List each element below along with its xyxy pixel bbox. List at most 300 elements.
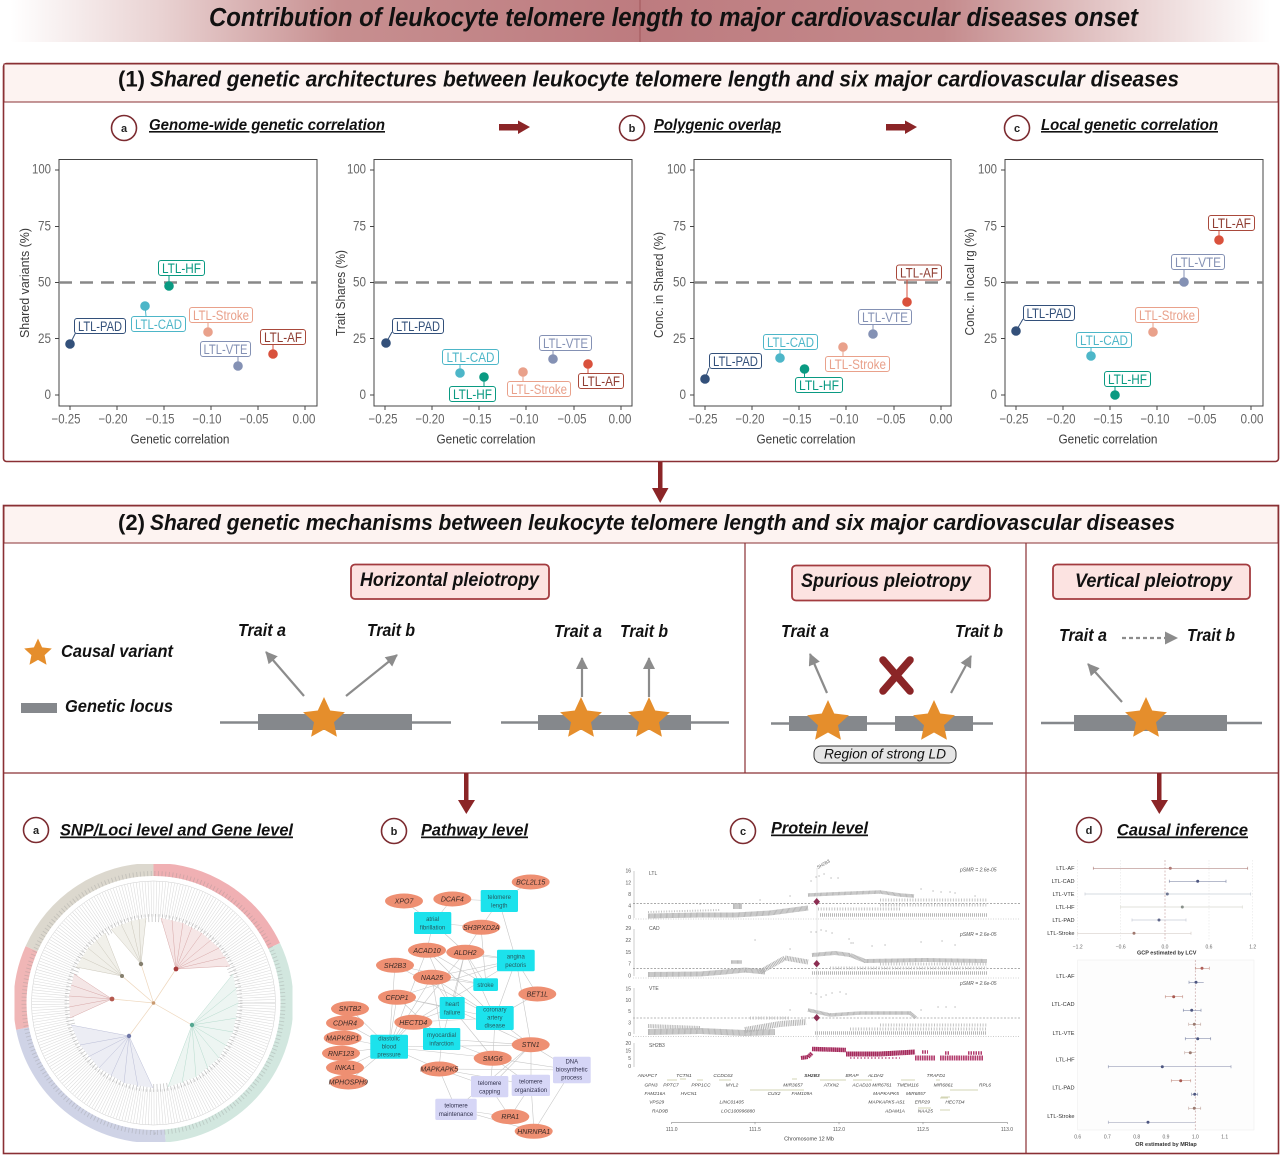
- legend: causal variant and genetic locus: [21, 638, 174, 716]
- legend: causal variant and genetic locus: Causal variant: [61, 641, 174, 661]
- track: SH2B3 eQTL: 15: [625, 1048, 631, 1054]
- scatter plot: trait shares: −0.20: [416, 412, 444, 426]
- scatter plot: shared variants: −0.20: [98, 412, 128, 426]
- point: LTL-HF: LTL-HF: [162, 261, 201, 276]
- telomere process nodes: process: [561, 1076, 582, 1082]
- scatter plot: shared variants: Genetic correlation: [130, 432, 230, 446]
- gene track: ADAM1A: [884, 1109, 905, 1115]
- point: LTL-Stroke: LTL-Stroke: [511, 382, 567, 397]
- diagram: two variants two traits: Trait a: [554, 621, 602, 641]
- point: LTL-CAD: [764, 334, 818, 362]
- gene track: MYL2: [726, 1082, 739, 1088]
- track: CAD: 0: [628, 974, 631, 980]
- heading c: protein level: c: [740, 826, 746, 838]
- point: LTL-HF: [796, 365, 842, 393]
- track: VTE: [625, 981, 997, 1038]
- scatter plot: trait shares: 25: [353, 331, 366, 346]
- track: CAD: CAD: [649, 926, 660, 932]
- legend: causal variant and genetic locus: Genetic locus: [65, 696, 173, 716]
- point: LTL-CAD: [132, 302, 186, 332]
- forest plot: GCP estimated by LCV: LTL-PAD: [1052, 918, 1074, 924]
- point: LTL-VTE: [1172, 254, 1224, 286]
- gene labels: INKA1: [335, 1065, 355, 1072]
- point: LTL-PAD: [701, 354, 762, 383]
- scatter plot: concentration in local rg: −0.20: [1046, 412, 1076, 426]
- disease nodes: myocardial: [427, 1033, 456, 1039]
- heading b: pathway level: b: [391, 826, 398, 838]
- track: LTL: 0: [628, 915, 631, 921]
- gene labels: RNF123: [328, 1051, 354, 1058]
- heading d: causal inference: [1076, 818, 1248, 842]
- diagram: one variant two traits: [220, 620, 451, 737]
- point: LTL-VTE: [540, 336, 592, 363]
- disease nodes: failure: [444, 1010, 461, 1016]
- forest plot: GCP estimated by LCV: 1.2: [1249, 944, 1256, 950]
- track: CAD: 15: [625, 950, 631, 956]
- scatter plot: trait shares: Genetic correlation: [436, 432, 536, 446]
- point: LTL-AF: [260, 330, 306, 358]
- track: SH2B3 eQTL: 20: [625, 1041, 631, 1047]
- point: LTL-VTE: [858, 310, 912, 338]
- fan: grey cluster one: [76, 933, 122, 976]
- point: LTL-CAD: LTL-CAD: [767, 335, 814, 350]
- gene labels: NAA25: [421, 975, 443, 982]
- gene track: RPL6: [979, 1082, 991, 1088]
- point: LTL-HF: [158, 260, 204, 290]
- icon: red cross: [883, 660, 910, 691]
- disease nodes: artery: [487, 1016, 502, 1022]
- gene track: HVCN1: [681, 1091, 697, 1097]
- label: horizontal pleiotropy: Horizontal pleiotropy: [360, 569, 540, 591]
- scatter plot: concentration in local rg: 75: [984, 218, 997, 234]
- scatter plot: trait shares: −0.15: [462, 412, 492, 426]
- heading b: pathway level: [382, 818, 529, 844]
- scatter plot: concentration in shared: −0.10: [830, 412, 858, 426]
- gene track: MIR6857: [906, 1091, 926, 1097]
- scatter plot: trait shares: Trait Shares (%): [333, 250, 348, 336]
- scatter plot: concentration in shared: [651, 160, 952, 446]
- track: VTE: 3: [628, 1020, 631, 1026]
- point: LTL-VTE: [200, 342, 250, 370]
- telomere process nodes: [435, 1057, 591, 1120]
- scatter plot: concentration in local rg: 100: [978, 162, 997, 176]
- gene labels: XPO7: [394, 898, 414, 906]
- forest plot: GCP estimated by LCV: −1.2: [1073, 944, 1083, 950]
- chromosome axis: Chromosome 12 Mb: [784, 1136, 834, 1142]
- disease nodes: infarction: [429, 1042, 454, 1048]
- track: LTL: 12: [625, 880, 631, 886]
- heading b: pathway level: Pathway level: [421, 820, 529, 840]
- scatter plot: concentration in local rg: −0.10: [1140, 412, 1170, 426]
- point: LTL-AF: LTL-AF: [900, 266, 938, 280]
- title bar: Contribution of leukocyte telomere length to major cardiovascular diseases onset: [209, 4, 1139, 32]
- tree trunk branches: [112, 964, 192, 1036]
- track: VTE: 15: [625, 986, 631, 992]
- disease nodes: length: [491, 904, 507, 910]
- point: LTL-VTE: LTL-VTE: [543, 336, 588, 351]
- point: LTL-CAD: [1076, 332, 1132, 360]
- forest plot: GCP estimated by LCV: 0.0: [1162, 944, 1169, 950]
- scatter plot: shared variants: Shared variants (%): [17, 228, 32, 338]
- gene labels: CDHR4: [333, 1020, 357, 1028]
- gene track: GPN3: [644, 1082, 658, 1088]
- gene track: ALDH2: [867, 1073, 884, 1079]
- gene labels: STN1: [522, 1042, 540, 1049]
- scatter plot: concentration in local rg: [962, 160, 1264, 446]
- gene track: RAD9B: [652, 1109, 669, 1115]
- forest plot: OR estimated by MRlap: LTL-HF: [1056, 1058, 1075, 1064]
- heading a: SNP/Loci level and Gene level: [24, 818, 294, 842]
- scatter plot: trait shares: 75: [353, 218, 366, 234]
- panel 2 heading: (2): [118, 510, 145, 535]
- scatter plot: shared variants: −0.05: [240, 412, 268, 426]
- diagram: one variant two traits: Trait a: [238, 620, 286, 640]
- scatter plot: trait shares: 0: [360, 387, 366, 402]
- gene track: PPTC7: [663, 1082, 679, 1088]
- gene track: NAA25: [918, 1109, 933, 1115]
- gene track: BRAP: [845, 1073, 859, 1079]
- scatter plot: shared variants: [17, 160, 317, 446]
- forest plot: GCP estimated by LCV: LTL-Stroke: [1047, 931, 1074, 937]
- forest plot: OR estimated by MRlap: LTL-Stroke: [1047, 1114, 1074, 1120]
- telomere process nodes: organization: [514, 1088, 547, 1094]
- step a heading: Genome-wide genetic correlation: [149, 117, 385, 134]
- gene labels: ACAD10: [412, 948, 441, 955]
- gene labels: CFDP1: [386, 995, 409, 1002]
- gene labels: BET1L: [527, 992, 548, 998]
- point: LTL-CAD: LTL-CAD: [446, 350, 495, 365]
- forest plot: OR estimated by MRlap: 0.9: [1163, 1134, 1170, 1140]
- title bar: [10, 0, 1270, 42]
- scatter plot: concentration in shared: −0.15: [782, 412, 812, 426]
- scatter plot: concentration in shared: −0.25: [688, 412, 718, 426]
- forest plot: OR estimated by MRlap: 1.0: [1192, 1134, 1199, 1140]
- point: LTL-VTE: LTL-VTE: [1175, 255, 1221, 270]
- panel 2 heading: Shared genetic mechanisms between leukocyte telomere length and six major cardiovascular diseases: [150, 510, 1175, 535]
- track: SH2B3 eQTL: SH2B3: [649, 1043, 665, 1049]
- point: LTL-PAD: [382, 318, 444, 347]
- scatter plot: concentration in shared: Genetic correlation: [756, 432, 856, 446]
- disease nodes: pressure: [377, 1052, 401, 1058]
- scatter plot: concentration in shared: Conc. in Shared (%): [651, 232, 666, 338]
- telomere process nodes: capping: [479, 1090, 500, 1096]
- gene track: TMEM116: [897, 1082, 919, 1088]
- track: VTE: 5: [628, 1009, 631, 1015]
- scatter plot: concentration in shared: 50: [673, 274, 686, 290]
- gene labels: HNRNPA1: [517, 1129, 550, 1136]
- diagram: two variants two traits: [501, 621, 729, 737]
- panel 1: shared genetic architectures: [4, 64, 1278, 462]
- point: LTL-Stroke: [190, 308, 252, 336]
- circular gene tree: [20, 870, 287, 1136]
- scatter plot: concentration in local rg: Conc. in local rg (%): [962, 228, 977, 336]
- forest plot: OR estimated by MRlap: LTL-CAD: [1052, 1002, 1074, 1008]
- diagram: vertical pleiotropy: [1041, 625, 1262, 737]
- gene track: [637, 1073, 991, 1115]
- icon: causal variant star: [24, 638, 52, 665]
- point: LTL-PAD: LTL-PAD: [713, 354, 758, 369]
- scatter plot: shared variants: 0: [44, 387, 51, 402]
- gene labels: HECTD4: [399, 1020, 427, 1027]
- disease nodes: disease: [484, 1024, 506, 1030]
- track: LTL: 16: [625, 868, 631, 874]
- gene labels: SMG6: [483, 1056, 503, 1063]
- forest plot: GCP estimated by LCV: GCP estimated by LCV: [1137, 950, 1197, 956]
- forest plot: GCP estimated by LCV: LTL-VTE: [1053, 892, 1075, 898]
- forest plot: GCP estimated by LCV: LTL-HF: [1056, 905, 1075, 911]
- panel 2 heading: [4, 506, 1278, 543]
- disease nodes: stroke: [477, 983, 494, 989]
- disease nodes: angina: [507, 954, 525, 960]
- point: LTL-AF: [896, 265, 942, 306]
- track: CAD: 29: [625, 926, 631, 932]
- track: CAD: 7: [628, 962, 631, 968]
- disease nodes: blood: [382, 1044, 396, 1050]
- panel 1 heading: Shared genetic architectures between leukocyte telomere length and six major cardiovascular diseases: [150, 66, 1179, 92]
- gene track: MAPKAPK5-AS1: [868, 1100, 905, 1106]
- gene labels: RPA1: [501, 1114, 519, 1121]
- point: LTL-AF: [1208, 216, 1254, 244]
- track: CAD: [625, 926, 997, 980]
- track: CAD: pSMR = 2.6e-05: [959, 932, 997, 938]
- diagram: spurious pleiotropy with LD region: Trait b: [955, 621, 1003, 641]
- scatter plot: trait shares: −0.25: [368, 412, 398, 426]
- scatter plot: concentration in shared: 100: [667, 162, 686, 176]
- scatter plot: concentration in local rg: −0.05: [1188, 412, 1216, 426]
- forest plot: OR estimated by MRlap: LTL-AF: [1056, 974, 1075, 980]
- label: region of strong LD: Region of strong LD: [824, 746, 946, 762]
- gene track: FAM109A: [792, 1091, 812, 1097]
- scatter plot: shared variants: 0.00: [292, 412, 316, 426]
- forest plot: OR estimated by MRlap: [1047, 960, 1254, 1148]
- telomere process nodes: telomere: [478, 1081, 502, 1087]
- gene track: ERP29: [915, 1100, 930, 1106]
- gene track: MIR6761: [872, 1082, 892, 1088]
- diagram: one variant two traits: Trait b: [367, 620, 415, 640]
- forest plot: OR estimated by MRlap: 0.6: [1074, 1134, 1081, 1140]
- gene track: ATXN2: [823, 1082, 839, 1088]
- heading d: causal inference: d: [1086, 825, 1092, 837]
- telomere process nodes: telomere: [444, 1104, 468, 1110]
- track: SH2B3 eQTL: [625, 1041, 983, 1070]
- chromosome axis: [666, 1122, 1013, 1142]
- point: LTL-HF: LTL-HF: [453, 387, 492, 402]
- arrow: vertical pleiotropy down to causal inference: [1151, 773, 1168, 814]
- forest plot: OR estimated by MRlap: 0.7: [1104, 1134, 1111, 1140]
- scatter plot: concentration in local rg: 25: [984, 331, 997, 346]
- heading c: protein level: [730, 818, 869, 844]
- track: CAD: 22: [625, 938, 631, 944]
- chromosome axis: 111.5: [749, 1127, 761, 1133]
- scatter plot: shared variants: 50: [38, 274, 51, 290]
- track: LTL: SH2B3: [816, 858, 831, 870]
- step a heading: a: [121, 123, 128, 135]
- track: VTE: 10: [625, 998, 631, 1004]
- point: LTL-Stroke: LTL-Stroke: [1139, 308, 1195, 323]
- gene labels: SH2B3: [384, 963, 406, 970]
- track: LTL: 4: [628, 904, 631, 910]
- label: vertical pleiotropy: Vertical pleiotropy: [1075, 570, 1233, 592]
- disease nodes: [370, 890, 535, 1059]
- disease nodes: diastolic: [378, 1036, 400, 1042]
- disease nodes: atrial: [426, 917, 439, 923]
- scatter plot: concentration in shared: −0.05: [876, 412, 906, 426]
- step b heading: b: [629, 123, 636, 135]
- scatter plot: trait shares: −0.10: [510, 412, 538, 426]
- forest plot: OR estimated by MRlap: OR estimated by MRlap: [1135, 1142, 1197, 1148]
- panel 1 heading: (1): [118, 66, 145, 92]
- gene track: ANAPC7: [637, 1073, 657, 1079]
- point: LTL-AF: LTL-AF: [582, 374, 620, 389]
- label: spurious pleiotropy: [792, 566, 990, 600]
- forest plot: GCP estimated by LCV: 0.6: [1206, 944, 1213, 950]
- scatter plot: trait shares: 0.00: [608, 412, 632, 426]
- diagram: two variants two traits: Trait b: [620, 621, 668, 641]
- gene labels: [326, 880, 550, 1136]
- diagram: vertical pleiotropy: Trait b: [1187, 625, 1235, 645]
- point: LTL-Stroke: [1136, 308, 1198, 336]
- scatter plot: concentration in local rg: 50: [984, 274, 997, 290]
- diagram: vertical pleiotropy: Trait a: [1059, 625, 1107, 645]
- scatter plot: concentration in local rg: 0.00: [1240, 412, 1264, 426]
- scatter plot: shared variants: 100: [32, 162, 51, 176]
- point: LTL-VTE: LTL-VTE: [204, 342, 248, 357]
- gene track: SH2B3: [804, 1073, 820, 1079]
- scatter plot: trait shares: [333, 160, 632, 446]
- locus zoom plot: [625, 858, 1020, 1142]
- gene track: MIR3657: [783, 1082, 803, 1088]
- chromosome axis: 112.0: [833, 1127, 845, 1133]
- step c heading: Local genetic correlation: [1041, 117, 1218, 134]
- point: LTL-Stroke: [508, 368, 570, 397]
- gene labels: MPHOSPH9: [329, 1080, 368, 1086]
- fan: green cluster: [168, 974, 238, 1087]
- gene track: LINC01405: [720, 1100, 744, 1106]
- gene track: MIR6861: [934, 1082, 953, 1088]
- forest plot: OR estimated by MRlap: 0.8: [1133, 1134, 1140, 1140]
- gene track: LOC100996880: [721, 1109, 755, 1115]
- scatter plot: trait shares: 50: [353, 274, 366, 290]
- heading d: causal inference: Causal inference: [1117, 820, 1248, 840]
- point: LTL-Stroke: [826, 343, 890, 372]
- label: vertical pleiotropy: [1053, 564, 1250, 599]
- track: SH2B3 eQTL: 0: [628, 1064, 631, 1070]
- scatter plot: trait shares: −0.05: [558, 412, 586, 426]
- step c heading: [1004, 116, 1218, 140]
- point: LTL-PAD: [1012, 306, 1074, 335]
- scatter plot: concentration in shared: 75: [673, 218, 686, 234]
- point: LTL-HF: [450, 373, 496, 402]
- chromosome axis: 111.0: [666, 1127, 678, 1133]
- track: LTL: LTL: [649, 871, 657, 877]
- disease nodes: heart: [445, 1002, 459, 1008]
- gene track: PPP1CC: [691, 1082, 711, 1088]
- fan: red cluster: [161, 918, 230, 969]
- scatter plot: concentration in local rg: −0.25: [1000, 412, 1028, 426]
- telomere process nodes: DNA: [565, 1060, 578, 1066]
- disease nodes: coronary: [483, 1008, 506, 1014]
- track: SH2B3 eQTL: 5: [628, 1056, 631, 1062]
- point: LTL-PAD: LTL-PAD: [78, 319, 122, 334]
- gene track: TRAFD1: [927, 1073, 946, 1079]
- track: VTE: VTE: [649, 986, 659, 992]
- step b heading: Polygenic overlap: [654, 117, 781, 134]
- gene labels: ALDH2: [453, 950, 477, 957]
- scatter plot: concentration in shared: 0.00: [930, 412, 952, 426]
- telomere process nodes: maintenance: [439, 1112, 474, 1118]
- gene labels: SH3PXD2A: [463, 925, 500, 932]
- scatter plot: shared variants: 25: [38, 331, 51, 346]
- fan: grey cluster two: [111, 918, 146, 964]
- scatter plot: trait shares: 100: [347, 162, 366, 176]
- scatter plot: concentration in shared: 0: [680, 387, 686, 402]
- diagram: spurious pleiotropy with LD region: Trait a: [781, 621, 829, 641]
- diagram: spurious pleiotropy with LD region: [771, 621, 1003, 763]
- point: LTL-Stroke: LTL-Stroke: [193, 308, 249, 323]
- gene labels: BCL2L15: [516, 880, 545, 886]
- scatter plot: shared variants: −0.10: [192, 412, 222, 426]
- point: LTL-PAD: [66, 318, 126, 348]
- point: LTL-PAD: LTL-PAD: [396, 319, 440, 334]
- telomere process nodes: telomere: [519, 1080, 543, 1086]
- point: LTL-AF: LTL-AF: [1212, 216, 1251, 231]
- forest plot: GCP estimated by LCV: −0.6: [1116, 944, 1126, 950]
- label: spurious pleiotropy: Spurious pleiotropy: [801, 570, 972, 592]
- chromosome axis: 112.5: [917, 1127, 929, 1133]
- forest plot: OR estimated by MRlap: LTL-VTE: [1053, 1031, 1075, 1037]
- network edges: [341, 882, 572, 1131]
- point: LTL-HF: LTL-HF: [1108, 372, 1147, 387]
- forest plot: GCP estimated by LCV: LTL-AF: [1056, 866, 1075, 872]
- disease nodes: telomere: [488, 895, 512, 901]
- step c heading: c: [1014, 123, 1020, 135]
- point: LTL-AF: [578, 360, 624, 389]
- scatter plot: concentration in local rg: 0: [990, 387, 997, 402]
- step a heading: [112, 116, 385, 140]
- heading a: SNP/Loci level and Gene level: SNP/Loci level and Gene level: [60, 820, 294, 840]
- forest plot: OR estimated by MRlap: 1.1: [1221, 1134, 1228, 1140]
- fan: blue cluster: [71, 1025, 153, 1088]
- gene labels: DCAF4: [441, 896, 464, 904]
- point: LTL-AF: LTL-AF: [264, 330, 302, 345]
- gene labels: MAPKBP1: [326, 1036, 359, 1042]
- pathway network: [322, 874, 591, 1139]
- gene track: VPS29: [649, 1100, 664, 1106]
- fan: second red cluster: [69, 974, 112, 1018]
- forest plot: GCP estimated by LCV: [1047, 860, 1256, 956]
- point: LTL-Stroke: LTL-Stroke: [829, 357, 886, 372]
- track: LTL: 8: [628, 892, 631, 898]
- scatter plot: shared variants: 75: [38, 218, 51, 234]
- heading c: protein level: Protein level: [771, 818, 869, 838]
- chromosome axis: 113.0: [1001, 1127, 1013, 1133]
- point: LTL-VTE: LTL-VTE: [862, 310, 908, 325]
- scatter plot: concentration in local rg: −0.15: [1094, 412, 1122, 426]
- gene track: TCTN1: [676, 1073, 692, 1079]
- track: VTE: 0: [628, 1032, 631, 1038]
- gene track: ACAD10: [851, 1082, 871, 1088]
- forest plot: OR estimated by MRlap: LTL-PAD: [1052, 1086, 1074, 1092]
- panel 2: shared genetic mechanisms: [4, 506, 1278, 1154]
- label: horizontal pleiotropy: [351, 564, 549, 599]
- heading a: SNP/Loci level and Gene level: a: [33, 825, 40, 837]
- point: LTL-CAD: LTL-CAD: [135, 317, 182, 332]
- scatter plot: concentration in shared: −0.20: [736, 412, 764, 426]
- point: LTL-HF: [1104, 372, 1150, 399]
- gene labels: SNTB2: [339, 1006, 361, 1013]
- point: LTL-PAD: LTL-PAD: [1026, 306, 1072, 321]
- gene nodes: [322, 874, 556, 1139]
